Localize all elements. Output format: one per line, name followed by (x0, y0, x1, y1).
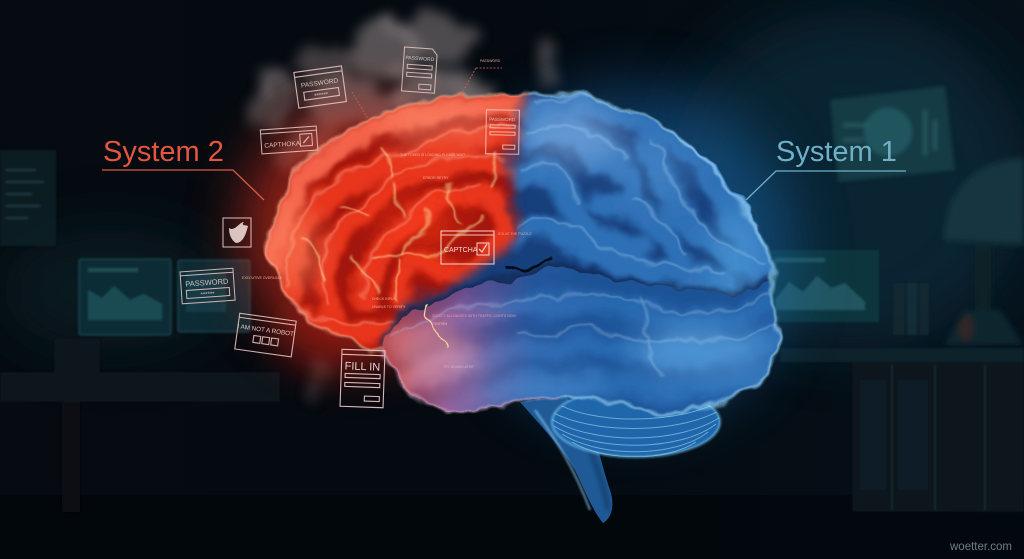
right counter and cabinets (780, 348, 1024, 512)
floating UI card: password form (402, 47, 437, 93)
blue sheen (515, 103, 766, 325)
outer glow around brain (245, 85, 795, 425)
brain: cerebrum with red System 2 and blue System 1 halves (250, 80, 790, 420)
lab monitor: right middle (766, 250, 879, 322)
hot glow (273, 109, 500, 295)
floating UI card: password tilted: ****** (314, 92, 329, 100)
yellow crack lines (300, 150, 500, 300)
lab lamp and equipment (944, 158, 1024, 345)
temporal rim (384, 350, 565, 409)
temporal lobe shadow (384, 267, 780, 350)
tiny floating annotations: UNABLE TO VERIFY (372, 305, 406, 309)
floating UI card: password on brain (486, 110, 519, 154)
brain rim light: red (270, 94, 530, 350)
lab monitor: left desk 1 (79, 259, 171, 335)
smoke above the overheated brain (255, 9, 554, 400)
lab monitor: upper right wall (830, 86, 955, 182)
label: System 1 (746, 136, 906, 200)
label: System 2 (102, 136, 264, 200)
cerebellum (550, 397, 722, 460)
tiny floating annotations: CONFIRM (431, 322, 447, 326)
floating UI card: password form: PASSWORD (405, 55, 435, 63)
dotted leader lines from cards (352, 68, 502, 122)
floating UI card: I am not a robot: I AM NOT A ROBOT (237, 323, 294, 338)
label: System 1: System 1 (776, 136, 897, 168)
tiny floating annotations: EXECUTIVE OVERLOAD (242, 276, 283, 280)
tiny floating annotations: CHECK INPUT (372, 297, 397, 301)
label: System 2: System 2 (103, 136, 224, 168)
black fissure (503, 258, 552, 272)
brain rim light: blue (530, 94, 778, 409)
floating UI card: captcha pencil (260, 126, 318, 154)
floating UI card: captcha check (441, 231, 494, 264)
floating UI card: password lower (180, 268, 235, 304)
lab monitor: far left (0, 150, 56, 246)
brain stem (520, 395, 612, 523)
floating UI card: password lower: PASSWORD (185, 277, 229, 289)
floating UI card: fill in: FILL IN (344, 360, 380, 374)
tiny floating annotations (242, 59, 532, 369)
floating UI card: I am not a robot (234, 313, 296, 357)
floating UI card: password lower: ****** (200, 292, 216, 299)
floating UI card: captcha pencil: CAPTHOKA (264, 140, 301, 150)
tiny floating annotations: SOLVE THE PUZZLE (498, 232, 532, 236)
red frontal folds (264, 94, 534, 350)
floating UI card: password tilted (294, 66, 346, 108)
watermark: woetter.com (949, 541, 1012, 553)
left desk (0, 338, 280, 512)
floating UI card: captcha check: CAPTCHA (444, 247, 478, 254)
floating UI card: password tilted: PASSWORD (301, 77, 339, 90)
tiny floating annotations: THE TOKEN IS LOADING PLEASE WAIT (400, 153, 466, 157)
floating UI card: fill in (340, 349, 385, 408)
blue hemisphere folds (260, 85, 790, 420)
floating UI card: password on brain: PASSWORD (489, 117, 516, 122)
tiny floating annotations: PASSWORD (480, 59, 501, 63)
tiny floating annotations: SELECT ALL IMAGES WITH TRAFFIC LIGHTS NOW (432, 314, 516, 318)
binders on the right shelf (893, 283, 929, 335)
temporal lobe (384, 267, 785, 420)
tiny floating annotations: TRY AGAIN LATER (443, 365, 474, 369)
tiny floating annotations: ERROR RETRY (423, 176, 449, 180)
lab monitor: left desk 2 (178, 260, 250, 332)
floating UI card: broken shield icon (223, 218, 251, 247)
